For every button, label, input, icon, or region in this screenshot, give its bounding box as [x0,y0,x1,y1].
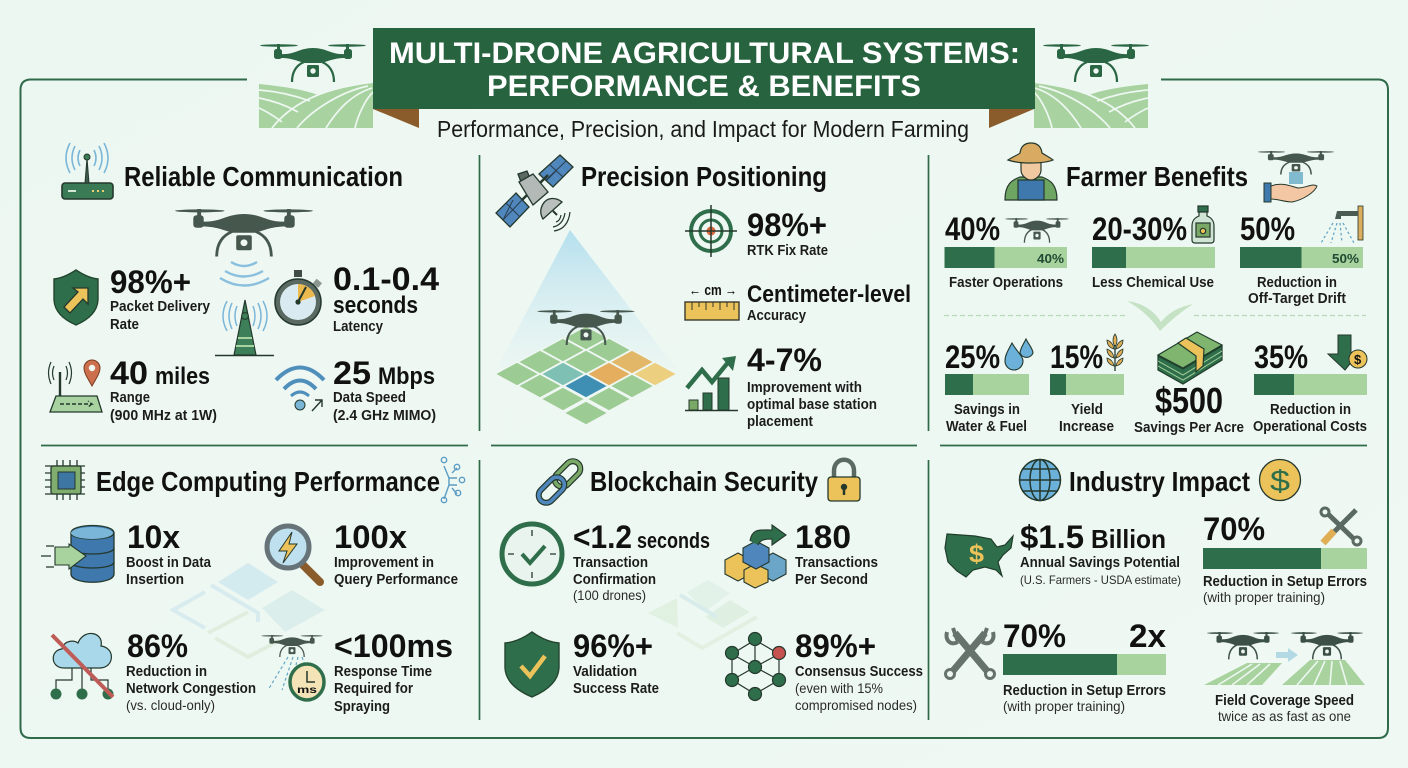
icon: crossed wrenches [946,628,994,678]
icon: padlock [828,460,860,501]
icon: stopwatch [275,270,322,325]
text: consensus: Consensus Success [795,664,923,680]
text: query performance: Improvement in [334,555,434,571]
chart: field grid [495,326,677,425]
text: data insertion: Insertion [126,572,184,588]
text: improvement [747,342,877,430]
icon: database [41,526,114,582]
icon: usa map: $ [969,540,984,568]
label: Reduction in Setup Errors [1203,574,1367,590]
text: data insertion: 10x [127,519,180,555]
text: rtk fix: RTK Fix Rate [747,243,828,259]
bar: faster operations: 40% [1037,251,1064,266]
text: 15 percent: 15% [1050,339,1103,375]
stat: transactions per second [725,519,878,588]
icon: drone [1005,218,1069,243]
text: network congestion [126,628,256,713]
field illustration right [1034,83,1148,128]
icon: range map [48,360,102,412]
text: 500 dollars: $500 [1155,380,1223,421]
heading: Farmer Benefits [1066,161,1248,192]
icon: water drops [1005,339,1033,370]
text: data speed: 25 [333,355,371,391]
text: response time [334,628,453,715]
stat: accuracy [685,281,911,324]
text: transaction confirmation: (100 drones) [573,587,646,603]
icon: down arrow and coin: $ [1354,352,1362,367]
text: data insertion [126,519,212,588]
label [1248,275,1346,307]
icon: signal waves [220,262,269,286]
label: Reduction in Setup Errors [1003,683,1166,699]
text: 70 percent and 2x [1003,618,1166,654]
bar: setup errors top [1203,548,1367,569]
text: response time: <100ms [334,628,453,664]
stat: network congestion [50,628,256,713]
label: Off-Target Drift [1248,291,1346,307]
icon: spraying drone [261,635,324,700]
text: annual savings [1020,519,1181,587]
label [1203,574,1367,605]
heading: Edge Computing Performance [96,466,440,497]
label: Faster Operations [949,275,1063,291]
label: Field Coverage Speed [1215,693,1354,709]
watermark: faint field [648,580,757,648]
bar: water [945,374,1029,395]
text: improvement: placement [747,414,813,430]
label [1003,683,1166,714]
label: Less Chemical Use [1092,275,1214,291]
text: transaction confirmation [573,519,710,603]
icon: bottle [1192,206,1214,243]
label: Water & Fuel [946,419,1027,435]
text: packet delivery: Rate [110,317,139,333]
text: validation [573,628,659,697]
text: 25 percent: 25% [945,339,1000,375]
icon: two drones over fields [1204,632,1365,685]
text: rtk fix: 98%+ [747,207,827,243]
stat: setup errors top [1203,508,1367,605]
text: transaction confirmation: Confirmation [573,572,656,588]
stat: annual savings [945,519,1181,587]
text: transactions per second: Transactions [795,555,878,571]
title banner [373,28,1035,109]
stat: field coverage [1204,632,1365,724]
label: (with proper training) [1003,698,1125,714]
stat: latency [275,261,439,335]
stat: range [48,355,217,424]
text: consensus: (even with 15% [795,680,883,696]
text: 70 percent and 2x: 70% [1003,618,1066,654]
text: transactions per second [795,519,878,588]
panel: reliable communication [48,143,439,424]
label: Increase [1059,419,1114,435]
icon: satellite [496,155,573,227]
text: transactions per second: 180 [795,519,851,555]
label [1253,402,1367,435]
icon: chain link [536,458,583,506]
label [946,402,1027,435]
text: network congestion: 86% [127,628,188,664]
label: Operational Costs [1253,419,1367,435]
stat: savings per acre [1134,332,1244,436]
text: data speed: Data Speed [333,390,406,406]
icon: scanning drone [537,310,635,345]
icon: router [62,143,113,199]
stat: operational costs [1253,335,1367,435]
stat: drift [1240,206,1363,307]
text: range: miles [155,363,210,390]
text: network congestion: (vs. cloud-only) [126,697,215,713]
text: annual savings: (U.S. Farmers - USDA estimate) [1020,573,1181,587]
stat: packet delivery [54,264,210,333]
icon: crossed tools [1321,508,1361,545]
icon: drone over hand [1258,151,1334,202]
icon: radio tower [215,300,274,356]
icon: shield check [505,632,559,697]
icon: node tree [441,457,465,503]
text: transactions per second: Per Second [795,572,868,588]
bar: operational [1254,374,1367,395]
text: validation: Validation [573,664,637,680]
stat: rtk fix [685,205,828,259]
text: range [110,355,217,424]
stat: consensus [726,628,923,713]
bar: yield [1050,374,1124,395]
dividers [41,155,1367,720]
heading: Precision Positioning [581,161,827,192]
icon: central drone [175,209,313,256]
text: accuracy: Centimeter-level [747,281,911,308]
label: (with proper training) [1203,589,1325,605]
text: accuracy [747,281,911,324]
text: 40 percent: 40% [945,211,1000,247]
icon: globe [1020,460,1060,500]
text: 35 percent: 35% [1254,339,1308,375]
text: annual savings: Billion [1091,524,1166,554]
icon: shield arrow [54,270,98,325]
text: 500 dollars: Savings Per Acre [1134,420,1244,436]
heading: Industry Impact [1069,466,1250,497]
icon: wifi [276,368,324,411]
icon: clock with check [502,524,562,584]
text: query performance: Query Performance [334,572,458,588]
text: data insertion: Boost in Data [126,555,212,571]
title banner: MULTI-DRONE AGRICULTURAL SYSTEMS: [389,37,1020,70]
text: range: (900 MHz at 1W) [110,408,217,424]
text: improvement: 4-7% [747,342,822,378]
bar: setup errors bottom [1003,654,1166,675]
text: packet delivery: 98%+ [110,264,191,300]
text: 50 percent: 50% [1240,211,1295,247]
icon: drone right [1043,44,1149,82]
text: consensus [795,628,923,713]
label: Reduction in [1257,275,1337,291]
text: rtk fix [747,207,828,259]
label: Reduction in [1270,402,1351,418]
stat: improvement [685,342,877,430]
heading: Reliable Communication [124,161,403,192]
icon: crossed cloud [50,633,114,700]
icon: spraying drone: ms [297,685,318,696]
label: Savings in [954,402,1020,418]
icon: node network [726,632,786,700]
stat: query performance [267,519,458,588]
text: 500 dollars [1134,380,1244,436]
text: validation: Success Rate [573,681,659,697]
icon: target [685,205,737,257]
icon: ruler [685,282,739,320]
icon: chip [45,460,85,500]
text: latency: Latency [333,319,383,335]
divider with leaf mark [944,301,1366,331]
icon: drone left [260,44,366,82]
panel: farmer benefits [944,143,1367,436]
text: 70 percent and 2x: 2x [1129,618,1166,654]
text: transaction confirmation: Transaction [573,555,648,571]
icon: sprinkler [1321,206,1363,243]
label [1215,693,1354,724]
text: accuracy: Accuracy [747,308,806,324]
stat: data insertion [41,519,212,588]
text: response time: Response Time [334,664,432,680]
stat: response time [261,628,453,715]
text: range: 40 [110,355,148,391]
stat: faster operations [944,211,1069,291]
stat: data speed [276,355,436,424]
text: network congestion: Network Congestion [126,681,256,697]
text: network congestion: Reduction in [126,664,207,680]
stat: yield [1050,334,1124,435]
title banner: PERFORMANCE & BENEFITS [487,70,921,103]
text: response time: Spraying [334,699,390,715]
panel: edge computing performance [41,457,465,715]
ribbon fold left [373,109,419,128]
text: 70 percent: 70% [1203,511,1265,547]
text: transaction confirmation: <1.2 [573,519,632,555]
heading: Blockchain Security [590,466,818,497]
icon: money stack [1158,332,1222,384]
field illustration left [259,83,373,128]
icon: farmer [1005,143,1057,200]
text: response time: Required for [334,681,413,697]
text: range: Range [110,390,150,406]
label [1059,402,1114,435]
watermark: faint field [173,563,325,657]
stat: chemical use [1092,206,1215,291]
icon: dollar coin [1260,460,1300,500]
text: improvement: optimal base station [747,397,877,413]
ribbon fold right [989,109,1034,128]
panel: precision positioning [495,155,911,430]
panel: blockchain security [502,458,923,713]
text: validation: 96%+ [573,628,653,664]
label: twice as as fast as one [1218,708,1351,724]
stat: water and fuel [945,339,1033,435]
bar: drift: 50% [1332,251,1359,266]
text: data speed: (2.4 GHz MIMO) [333,408,436,424]
text: data speed [333,355,436,424]
stat: setup errors bottom [946,618,1166,714]
text: latency: 0.1-0.4 [333,261,439,297]
text: transaction confirmation: seconds [637,528,710,553]
icon: usa map [945,534,1013,577]
text: improvement: Improvement with [747,380,862,396]
header [259,28,1149,142]
icon: ruler: ← cm → [689,282,737,299]
text: packet delivery [110,264,210,333]
icon: magnifier [267,526,320,582]
subtitle: Performance, Precision, and Impact for Modern Farming [437,116,969,142]
text: latency: seconds [333,292,418,319]
stat: transaction confirmation [502,519,710,603]
text: 20-30 percent: 20-30% [1092,211,1187,247]
text: latency [333,261,439,335]
panel: industry impact [945,460,1367,724]
text: consensus: compromised nodes) [795,697,917,713]
icon: light beam [497,230,676,368]
text: query performance [334,519,458,588]
text: annual savings: $1.5 [1020,519,1084,555]
icon: cubes [725,525,786,588]
icon: satellite signal [553,212,570,231]
text: annual savings: Annual Savings Potential [1020,555,1180,571]
text: packet delivery: Packet Delivery [110,299,210,315]
icon: dollar coin: $ [1270,465,1290,498]
bar: chemical [1092,247,1215,268]
icon: growth chart [685,356,738,410]
icon: wheat [1107,334,1123,371]
text: data speed: Mbps [378,363,435,390]
stat: validation [505,628,659,697]
label: Yield [1071,402,1103,418]
text: consensus: 89%+ [795,628,876,664]
text: query performance: 100x [334,519,407,555]
